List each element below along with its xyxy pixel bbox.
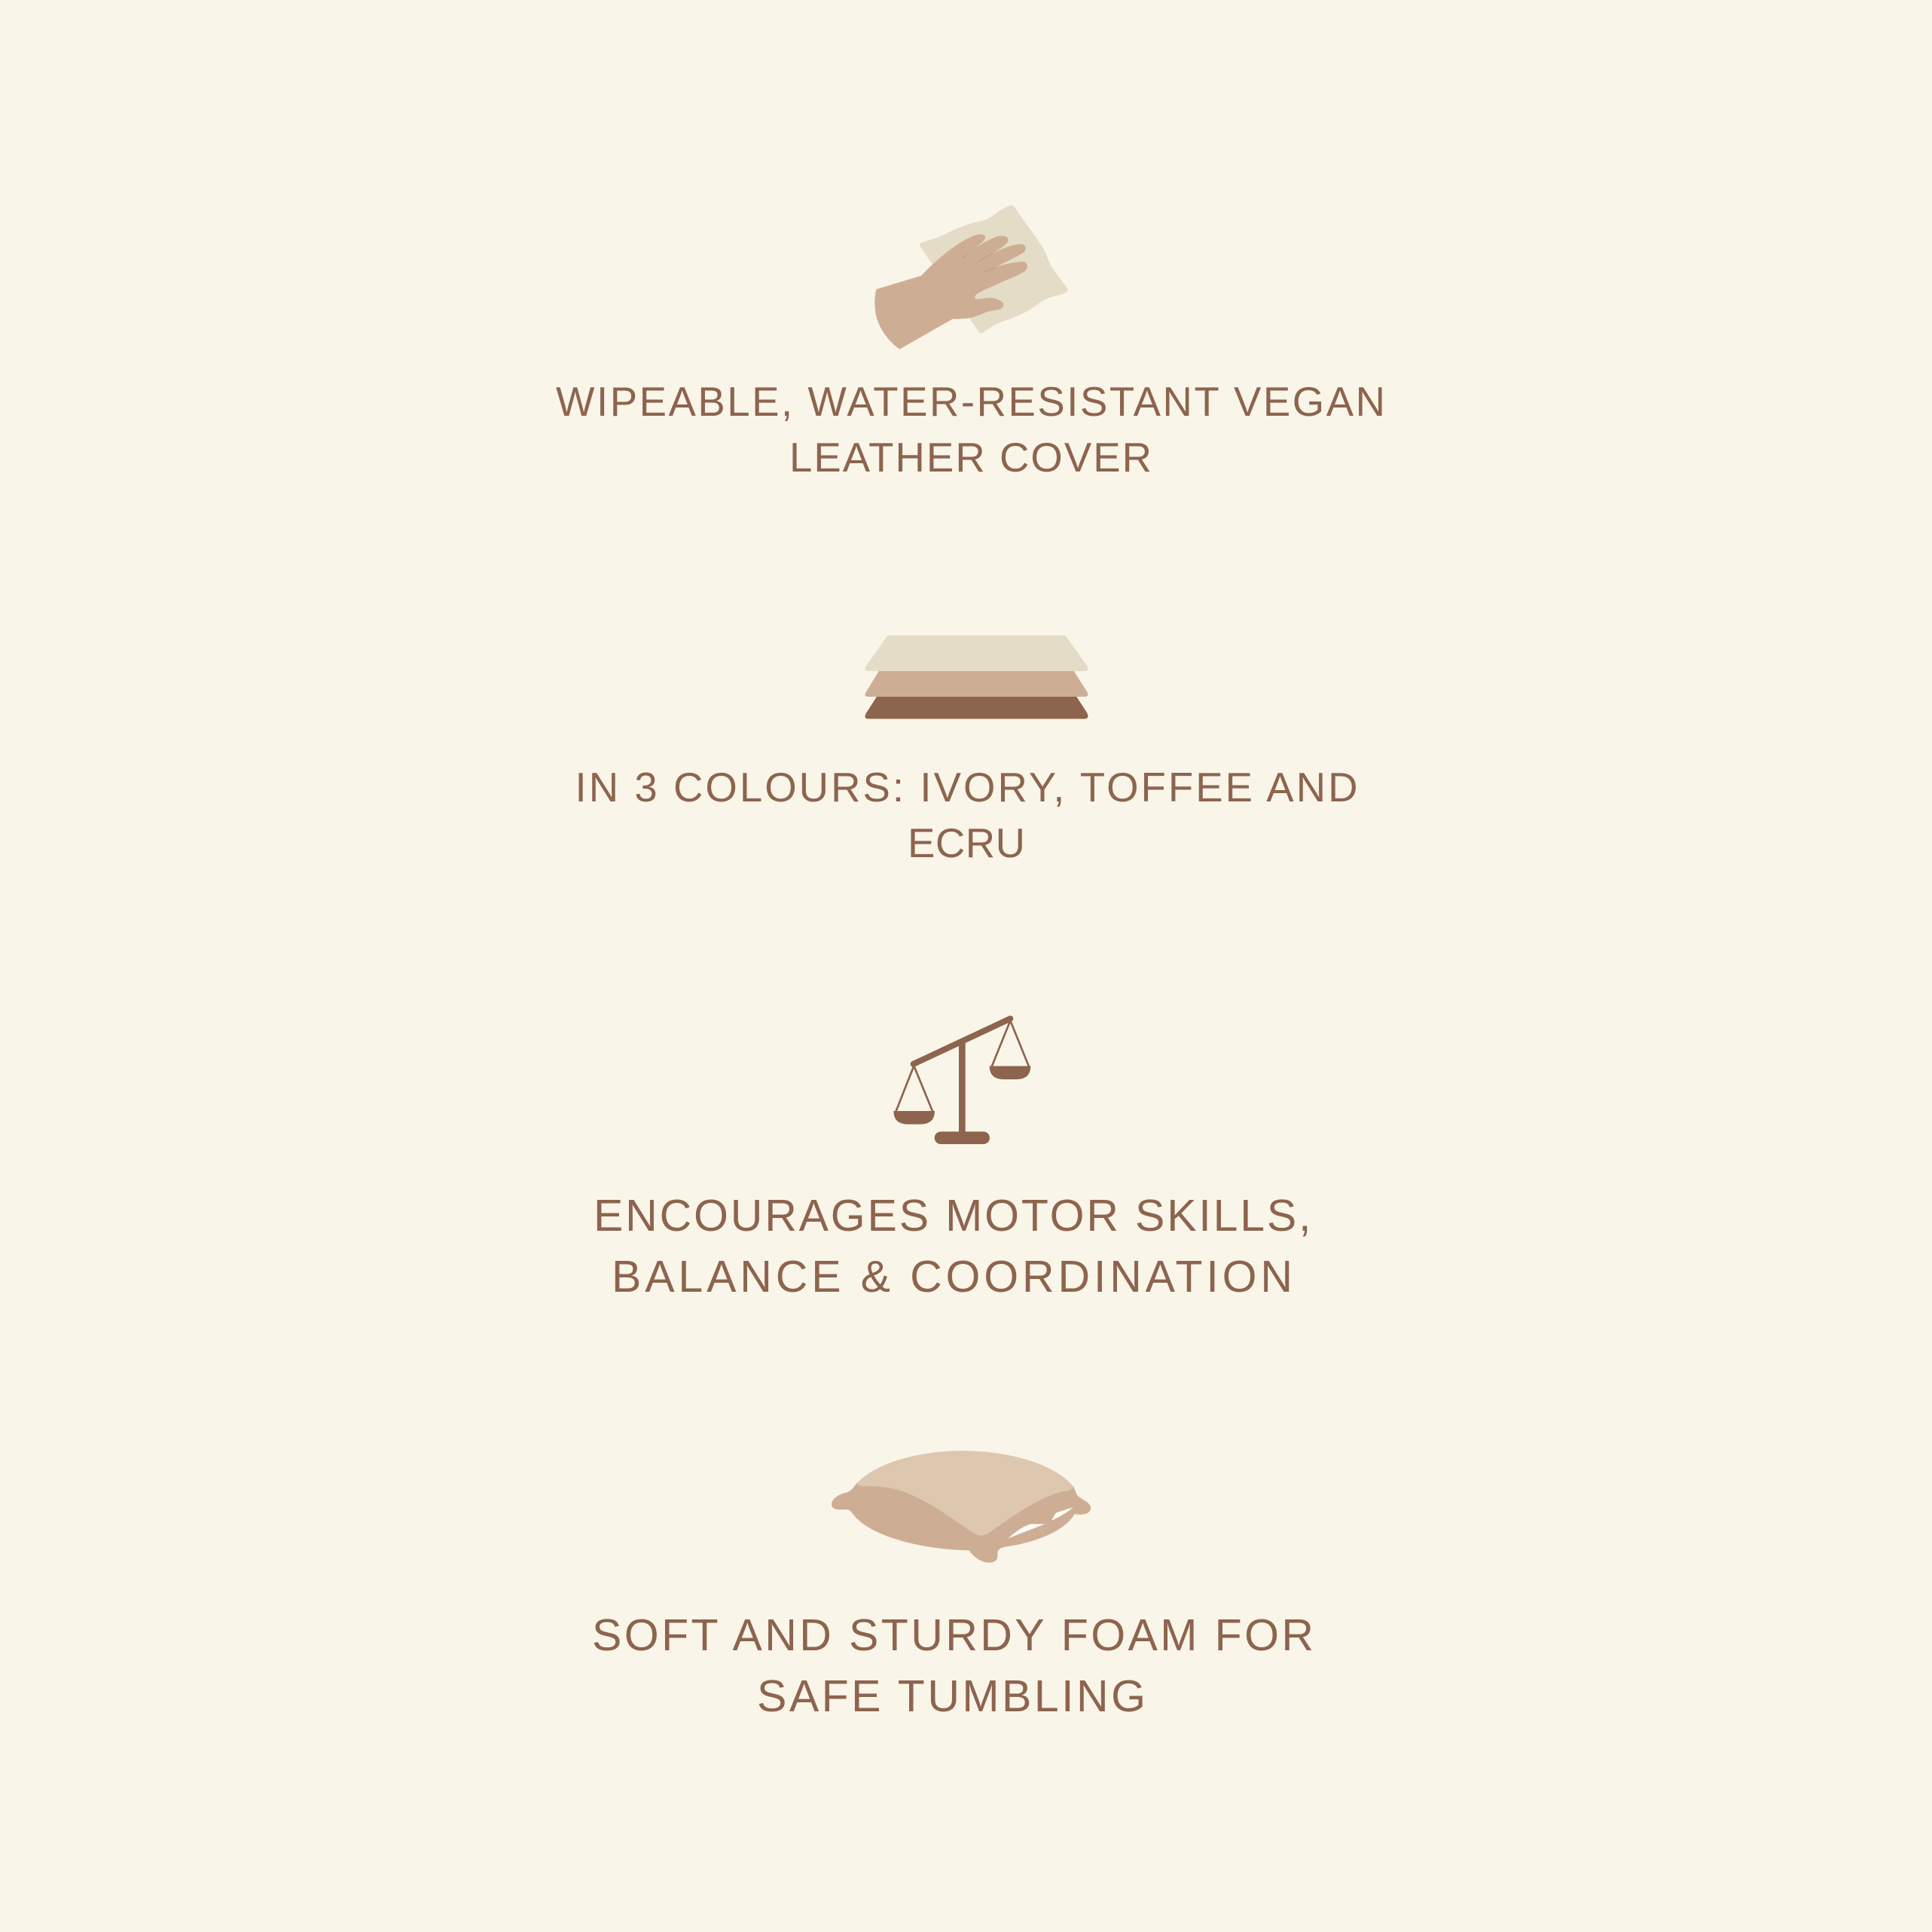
beam (914, 1018, 1010, 1064)
text: motor skills (594, 1191, 1311, 1302)
cloth (920, 205, 1067, 333)
text: soft foam: SAFE TUMBLING (757, 1671, 1146, 1721)
left pan (893, 1111, 935, 1125)
panel: wipeable cover (556, 205, 1385, 481)
swatch: ecru (865, 695, 1088, 719)
swatch: toffee (865, 669, 1088, 697)
icon: stacked colour swatches (865, 636, 1088, 719)
text: wipeable cover (556, 379, 1385, 481)
text: motor skills: ENCOURAGES MOTOR SKILLS, (594, 1191, 1311, 1241)
text: soft foam (592, 1610, 1314, 1721)
finger creases (962, 254, 995, 272)
text: motor skills: BALANCE & COORDINATION (612, 1252, 1293, 1302)
text: three colours: IN 3 COLOURS: IVORY, TOFFEE AND (575, 765, 1357, 810)
post (959, 1041, 966, 1134)
panel: motor skills (594, 1018, 1311, 1302)
icon: balance scale (893, 1018, 1030, 1144)
base (935, 1131, 990, 1144)
panel: three colours (575, 636, 1357, 866)
text: soft foam: SOFT AND STURDY FOAM FOR (592, 1610, 1314, 1660)
strings (896, 1021, 1029, 1112)
cushion top (857, 1451, 1073, 1536)
hand (874, 234, 1027, 349)
text: wipeable cover: WIPEABLE, WATER-RESISTANT VEGAN (556, 379, 1385, 425)
text: wipeable cover: LEATHER COVER (789, 435, 1152, 481)
icon: cushion (832, 1451, 1091, 1563)
text: three colours: ECRU (908, 820, 1025, 866)
icon: hand wiping with cloth (874, 205, 1067, 349)
panel: soft foam (592, 1451, 1314, 1721)
cushion body (832, 1482, 1091, 1563)
right pan (990, 1066, 1030, 1079)
cushion gap highlights (1008, 1507, 1073, 1538)
text: three colours (575, 765, 1357, 866)
swatch: ivory (865, 636, 1088, 671)
